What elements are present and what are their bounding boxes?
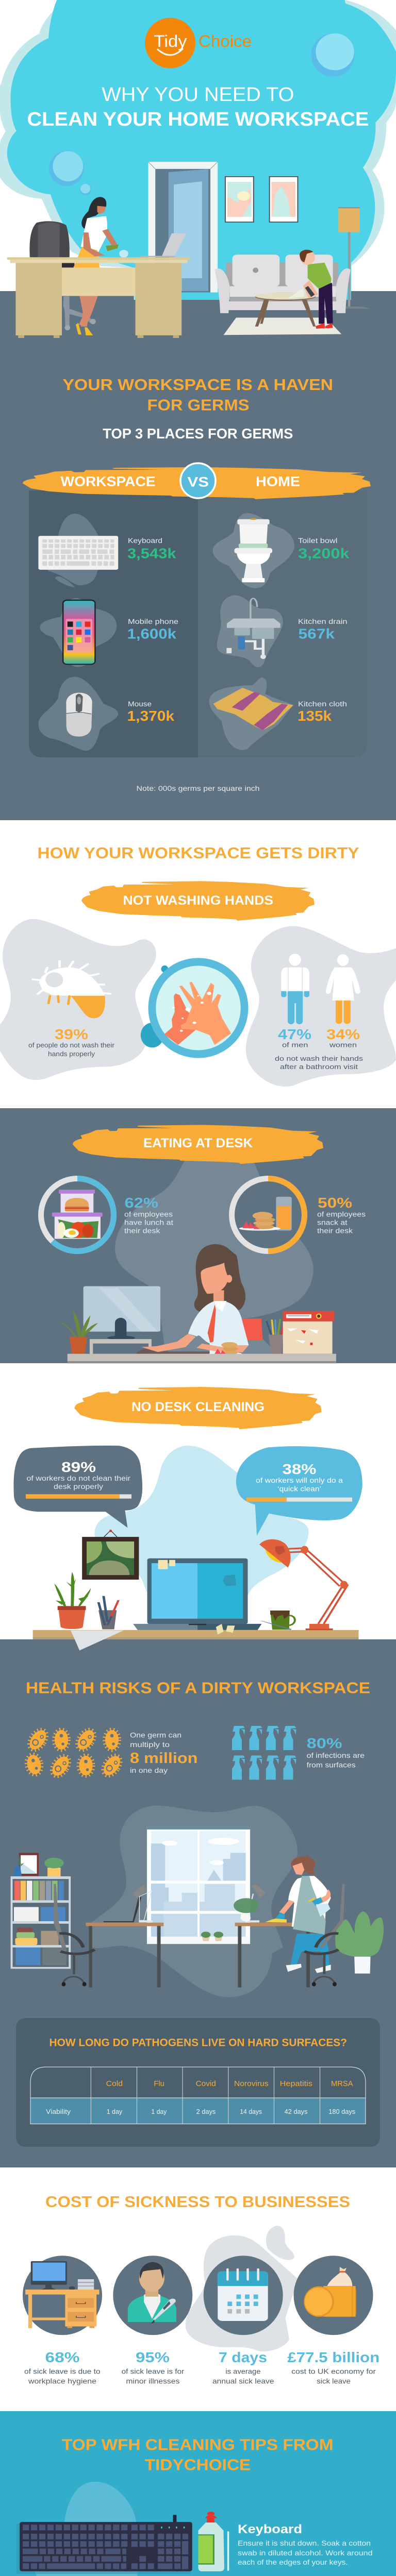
item: kitchen drain: Kitchen drain: [298, 618, 348, 625]
illustration: desk with laptop: [7, 233, 190, 338]
callout: 38% of workers: ‘quick clean’: [277, 1485, 321, 1493]
illustration: window with city view: [146, 1826, 251, 1944]
tip: keyboard: swab in diluted alcohol. Work around: [238, 2549, 372, 2557]
banner: workspace vs home: WORKSPACE: [61, 474, 156, 489]
stat: 80% of infections: from surfaces: [307, 1761, 356, 1769]
panel: left blob with germ statistic: [0, 919, 156, 1080]
illustration: woman cleaning desk: [73, 197, 128, 335]
stat: 95% minor illnesses: of sick leave is for: [122, 2367, 184, 2376]
donut chart: 62% lunch at desk: have lunch at: [124, 1219, 173, 1227]
banner: eating at desk: [73, 1125, 323, 1164]
stat: 80% of infections: of infections are: [307, 1751, 365, 1759]
donut chart: 62% lunch at desk: of employees: [124, 1211, 173, 1218]
panel: home column: [198, 490, 367, 757]
note: Note: 000s germs per square inch: [136, 784, 260, 792]
icon: soap bubbles: [49, 33, 355, 195]
heading: [63, 376, 333, 414]
stat: 7 days annual sick leave: annual sick leave: [212, 2377, 274, 2385]
heading: TIDYCHOICE: [145, 2456, 251, 2474]
item: kitchen cloth: [209, 677, 347, 750]
banner: no desk cleaning: NO DESK CLEANING: [131, 1400, 265, 1414]
table: 1 day: [151, 2108, 167, 2115]
heading: COST OF SICKNESS TO BUSINESSES: [45, 2193, 350, 2211]
stat: 7 days annual sick leave: is average: [225, 2367, 261, 2376]
illustration: potted plant: [335, 1911, 384, 1974]
heading: FOR GERMS: [147, 396, 250, 414]
item: toilet bowl: [212, 513, 350, 588]
stat: 8 million germs: multiply to: [130, 1740, 170, 1749]
item: keyboard: Keyboard: [128, 537, 162, 545]
section: no desk cleaning: [13, 1387, 362, 1651]
illustration: office chair: [29, 221, 96, 330]
callout: 38% of workers: of workers will only do a: [256, 1476, 343, 1484]
donut chart: 50% snack at desk: [232, 1179, 366, 1251]
item: toilet bowl: Toilet bowl: [298, 537, 338, 545]
banner: eating at desk: EATING AT DESK: [143, 1136, 253, 1150]
item: mouse: 1,370k: [127, 708, 174, 724]
title: [27, 84, 369, 130]
logo: TidyChoice: [145, 18, 252, 68]
item: kitchen drain: 567k: [298, 625, 335, 642]
item: mouse: [38, 677, 174, 751]
cloud background: [0, 0, 396, 300]
banner: not washing hands: NOT WASHING HANDS: [123, 893, 273, 908]
callout: 89% of workers: desk properly: [54, 1482, 103, 1490]
icon: man and woman figures: [281, 954, 360, 1024]
logo: TidyChoice: Tidy: [154, 32, 187, 50]
section: workspace is a haven for germs: [23, 376, 371, 792]
slate floor over cloud: [0, 300, 396, 362]
donut chart: 50% snack at desk: of employees: [317, 1211, 366, 1218]
table: Flu: [154, 2080, 164, 2088]
background blob: [186, 2226, 298, 2351]
tip: keyboard: Keyboard: [238, 2522, 302, 2536]
callout: 38% of workers: 38%: [283, 1461, 317, 1477]
item: mouse: Mouse: [128, 700, 152, 708]
illustration: lamp: [338, 207, 371, 309]
table: [30, 2067, 366, 2124]
illustration: messy desk: [33, 1530, 359, 1651]
donut chart: 50% snack at desk: 50%: [318, 1195, 352, 1211]
table heading: HOW LONG DO PATHOGENS LIVE ON HARD SURFACES?: [50, 2037, 347, 2048]
illustration: keyboard and alcohol bottle: [16, 2482, 229, 2576]
panel: left blob with germ statistic: hands properly: [48, 1050, 95, 1058]
item: keyboard: 3,543k: [127, 545, 176, 562]
tip: keyboard: each of the edges of your keys.: [238, 2558, 348, 2566]
panel: workspace column: [29, 490, 198, 757]
callout: 89% of workers: 89%: [61, 1459, 96, 1475]
header section: [0, 0, 396, 362]
donut chart: 62% lunch at desk: their desk: [124, 1227, 160, 1234]
table: Hepatitis: [280, 2080, 312, 2088]
heading: HEALTH RISKS OF A DIRTY WORKSPACE: [26, 1679, 370, 1697]
icon: lunch boxes: [52, 1190, 103, 1239]
item: keyboard: [38, 514, 176, 587]
item: mobile phone: Mobile phone: [128, 618, 178, 625]
stat: 77.5 billion cost: cost to UK economy for: [291, 2367, 376, 2376]
panel: right blob with gender statistic: [246, 926, 396, 1087]
table: 2 days: [196, 2108, 216, 2115]
panel: cleaning tips band: [0, 2411, 396, 2576]
stat: 7 days annual sick leave: [204, 2256, 283, 2385]
banner: no desk cleaning: [74, 1387, 321, 1429]
icon group: spray bottles: [232, 1726, 296, 1780]
section: WFH cleaning tips: [16, 2436, 377, 2576]
heading: TOP WFH CLEANING TIPS FROM: [62, 2436, 333, 2454]
stat: 8 million germs: in one day: [130, 1766, 168, 1774]
illustration: shelf with binders: [11, 1853, 71, 1969]
panel: pathogen lifespan table: [16, 2018, 380, 2147]
illustration: woman eating at desk: [59, 1244, 336, 1363]
illustration: woman cleaning desk: [265, 1855, 331, 1973]
stat: 68% workplace hygiene: of sick leave is due to: [24, 2367, 101, 2376]
panel: left blob with germ statistic: 39%: [55, 1026, 88, 1042]
stat: 95% minor illnesses: minor illnesses: [126, 2377, 179, 2385]
item: kitchen cloth: 135k: [298, 708, 332, 724]
stat: 8 million germs: One germ can: [130, 1731, 182, 1739]
item: toilet bowl: 3,200k: [298, 545, 350, 562]
panel: right blob with gender statistic: of men: [282, 1041, 308, 1049]
panel: right blob with gender statistic: women: [329, 1041, 357, 1049]
item: kitchen cloth: Kitchen cloth: [298, 700, 347, 708]
panel: right blob with gender statistic: after a bathroom visit: [280, 1063, 358, 1071]
banner: workspace vs home: [23, 463, 371, 499]
panel: right blob with gender statistic: do not wash their hands: [275, 1055, 364, 1062]
callout: 89% of workers: [13, 1446, 142, 1528]
stat: 80% of infections: 80%: [307, 1735, 342, 1751]
banner: not washing hands: [81, 881, 315, 921]
tip: keyboard: Ensure it is shut down. Soak a cotton: [238, 2539, 371, 2547]
title: CLEAN YOUR HOME WORKSPACE: [27, 109, 369, 130]
callout: 89% of workers: of workers do not clean their: [27, 1474, 130, 1482]
stat: 8 million germs: [130, 1731, 198, 1774]
stat: 77.5 billion cost: sick leave: [317, 2377, 351, 2385]
stat: 77.5 billion cost: £77.5 billion: [287, 2349, 380, 2365]
stat: 68% workplace hygiene: [23, 2256, 102, 2385]
logo: TidyChoice: Choice: [199, 32, 252, 50]
donut chart: 62% lunch at desk: 62%: [125, 1195, 158, 1211]
section: how your workspace gets dirty: [0, 844, 396, 1087]
icon group: germs: [25, 1726, 124, 1780]
illustration: door and wall art: [148, 162, 298, 293]
table: 14 days: [240, 2108, 262, 2115]
item: mobile phone: 1,600k: [127, 625, 176, 642]
section: cost of sickness to businesses: [23, 2193, 380, 2385]
stat: 77.5 billion cost: [287, 2256, 380, 2385]
panel: right blob with gender statistic: 47%: [278, 1026, 311, 1042]
item: kitchen drain: [217, 595, 348, 667]
illustration: sofa, coffee table and rug: [214, 255, 351, 335]
table: 42 days: [285, 2108, 308, 2115]
panel: eating section band: [0, 1108, 396, 1363]
icon: sick man with thermometer: [128, 2262, 176, 2324]
table: 180 days: [328, 2108, 356, 2115]
callout: 38% of workers: [236, 1446, 362, 1536]
table: MRSA: [331, 2080, 353, 2088]
item: mobile phone: [40, 598, 178, 667]
tip: keyboard: [16, 2482, 373, 2576]
donut chart: 50% snack at desk: their desk: [317, 1227, 353, 1234]
stat: 7 days annual sick leave: 7 days: [219, 2349, 267, 2365]
icon: half-filled germ: [33, 961, 110, 1018]
panel: health risks band: [0, 1639, 396, 2167]
banner: workspace vs home: HOME: [256, 474, 300, 489]
subheading: TOP 3 PLACES FOR GERMS: [103, 426, 293, 442]
table: Covid: [196, 2080, 216, 2088]
illustration: handwashing circle: [141, 958, 248, 1058]
icon: desk and computer: [25, 2261, 99, 2328]
donut chart: 50% snack at desk: snack at: [317, 1219, 348, 1227]
heading: HOW YOUR WORKSPACE GETS DIRTY: [37, 844, 359, 862]
section: health risks of a dirty workspace: [11, 1679, 384, 2147]
illustration: boy spraying table: [288, 250, 333, 329]
table: 1 day: [107, 2108, 123, 2115]
banner: workspace vs home: VS: [188, 474, 209, 489]
stat: 68% workplace hygiene: workplace hygiene: [28, 2377, 96, 2385]
title: WHY YOU NEED TO: [102, 84, 294, 106]
table: Cold: [106, 2080, 123, 2088]
icon: calendar: [218, 2269, 268, 2321]
stat: 95% minor illnesses: 95%: [136, 2349, 170, 2365]
panel: left blob with germ statistic: of people do not wash their: [28, 1041, 115, 1049]
background blob: [115, 1161, 314, 1354]
icon: money bag and coins: [304, 2267, 356, 2317]
illustration: office chairs: [54, 1884, 345, 1986]
stat: 80% of infections: [307, 1735, 365, 1769]
icon: cookies and juice: [239, 1197, 292, 1231]
illustration: desks with chairs and lamps: [86, 1884, 312, 1988]
background blob: [94, 1446, 309, 1597]
panel: top slate band: [0, 291, 396, 820]
table: Norovirus: [234, 2080, 269, 2088]
heading: [62, 2436, 333, 2474]
background blob: [91, 1805, 298, 1997]
section: eating at desk: [41, 1125, 366, 1363]
stat: 95% minor illnesses: [113, 2256, 192, 2385]
table: Viability: [46, 2108, 71, 2115]
donut chart: 62% lunch at desk: [41, 1179, 173, 1251]
stat: 68% workplace hygiene: 68%: [45, 2349, 80, 2365]
panel: right blob with gender statistic: 34%: [326, 1026, 360, 1042]
heading: YOUR WORKSPACE IS A HAVEN: [63, 376, 333, 394]
stat: 8 million germs: 8 million: [130, 1750, 198, 1767]
